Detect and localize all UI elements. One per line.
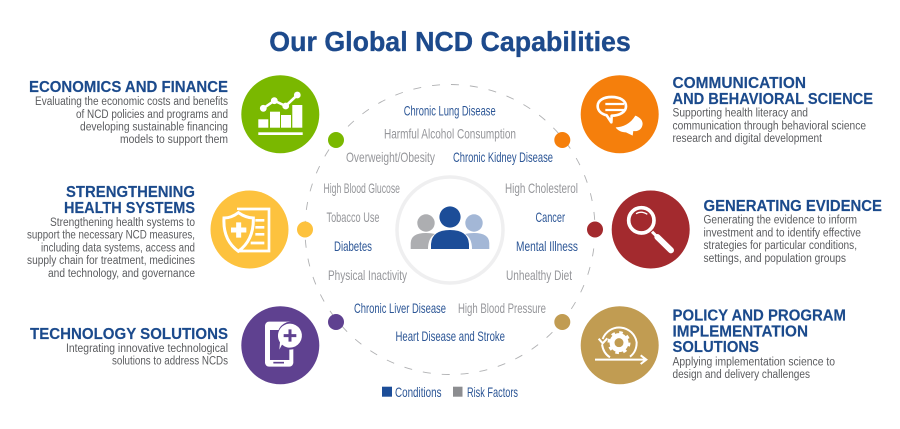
text block: strengthening: and technology, and governance — [48, 268, 195, 280]
text block: technology — [66, 343, 228, 368]
heading: communication: COMMUNICATION — [672, 75, 806, 92]
panel: policy and program implementation solutions — [581, 306, 846, 384]
text block: economics: Evaluating the economic costs and benefits — [35, 96, 228, 108]
heading: communication: AND BEHAVIORAL SCIENCE — [672, 91, 873, 108]
text block: communication: Supporting health literacy and — [672, 108, 808, 120]
conditions and risk factor labels: Unhealthy Diet — [506, 267, 572, 283]
conditions and risk factor labels: Harmful Alcohol Consumption — [384, 126, 516, 142]
conditions and risk factor labels: Chronic Lung Disease — [404, 103, 496, 119]
text block: generating evidence: investment and to identify effective — [704, 228, 861, 240]
conditions and risk factor labels: High Blood Pressure — [458, 300, 546, 316]
text block: generating evidence — [704, 214, 861, 265]
text block: policy: Applying implementation science to — [672, 356, 835, 368]
heading: policy: SOLUTIONS — [672, 339, 759, 356]
text block: strengthening: support the necessary NCD measures, — [27, 230, 195, 242]
text block: policy — [672, 356, 835, 381]
conditions and risk factor labels: Physical Inactivity — [328, 267, 407, 283]
panel: technology solutions — [30, 306, 319, 384]
conditions and risk factor labels: Overweight/Obesity — [346, 149, 435, 165]
text block: policy: design and delivery challenges — [672, 369, 810, 381]
icon: shield and document — [210, 190, 288, 268]
conditions and risk factor labels: Chronic Kidney Disease — [453, 149, 553, 165]
conditions and risk factor labels: Heart Disease and Stroke — [396, 328, 505, 344]
icon: gear cycle — [581, 306, 659, 384]
text block: communication: communication through behavioral science — [672, 120, 866, 132]
text block: communication — [672, 108, 866, 145]
conditions and risk factor labels: Tobacco Use — [326, 209, 380, 225]
text block: strengthening — [27, 217, 195, 280]
heading: economics: ECONOMICS AND FINANCE — [29, 79, 228, 96]
text block: generating evidence: Generating the evidence to inform — [704, 214, 857, 226]
text block: generating evidence: strategies for particular conditions, — [704, 240, 857, 252]
text block: communication: research and digital development — [672, 133, 823, 145]
legend — [382, 384, 518, 400]
icon: phone with health bubble — [241, 306, 319, 384]
heading: policy: POLICY AND PROGRAM — [672, 308, 846, 325]
text block: technology: solutions to address NCDs — [112, 356, 228, 368]
conditions and risk factor labels: Chronic Liver Disease — [354, 300, 446, 316]
heading: strengthening: HEALTH SYSTEMS — [64, 200, 195, 217]
conditions and risk factor labels: Diabetes — [334, 238, 372, 254]
dashed ring — [305, 84, 595, 374]
heading: strengthening — [64, 184, 195, 217]
heading: policy — [672, 308, 846, 356]
legend: Conditions — [395, 384, 442, 400]
text block: economics: of NCD policies and programs and — [76, 109, 228, 121]
conditions and risk factor labels: High Cholesterol — [505, 180, 578, 196]
text block: strengthening: Strengthening health systems to — [50, 217, 195, 229]
title: Our Global NCD Capabilities — [269, 26, 631, 57]
legend: Risk Factors — [467, 384, 518, 400]
panel: economics and finance — [29, 75, 319, 153]
node dots on ring — [297, 132, 603, 330]
heading: policy: IMPLEMENTATION — [672, 324, 808, 341]
heading: generating evidence: GENERATING EVIDENCE — [704, 198, 882, 215]
panel: generating evidence — [612, 190, 882, 268]
panel: strengthening health systems — [27, 184, 288, 280]
text block: economics: models to support them — [120, 134, 228, 146]
text block: strengthening: including data systems, access and — [41, 243, 195, 255]
text block: strengthening: supply chain for treatment, medicines — [27, 255, 195, 267]
heading: technology: TECHNOLOGY SOLUTIONS — [30, 326, 228, 343]
text block: economics: developing sustainable financing — [80, 122, 228, 134]
panel: communication and behavioral science — [581, 75, 873, 153]
conditions and risk factor labels: Cancer — [536, 209, 565, 225]
conditions and risk factor labels: High Blood Glucose — [324, 180, 400, 196]
text block: technology: Integrating innovative technological — [66, 343, 228, 355]
heading: communication — [672, 75, 873, 108]
icon: magnifying glass — [612, 190, 690, 268]
conditions and risk factor labels: Mental Illness — [516, 238, 578, 254]
icon: bar and line chart — [241, 75, 319, 153]
text block: economics — [35, 96, 228, 146]
icon: speech bubbles — [581, 75, 659, 153]
conditions and risk factor labels — [324, 103, 578, 344]
central people icon — [397, 177, 503, 283]
heading: strengthening: STRENGTHENING — [66, 184, 195, 201]
text block: generating evidence: settings, and population groups — [704, 253, 846, 265]
